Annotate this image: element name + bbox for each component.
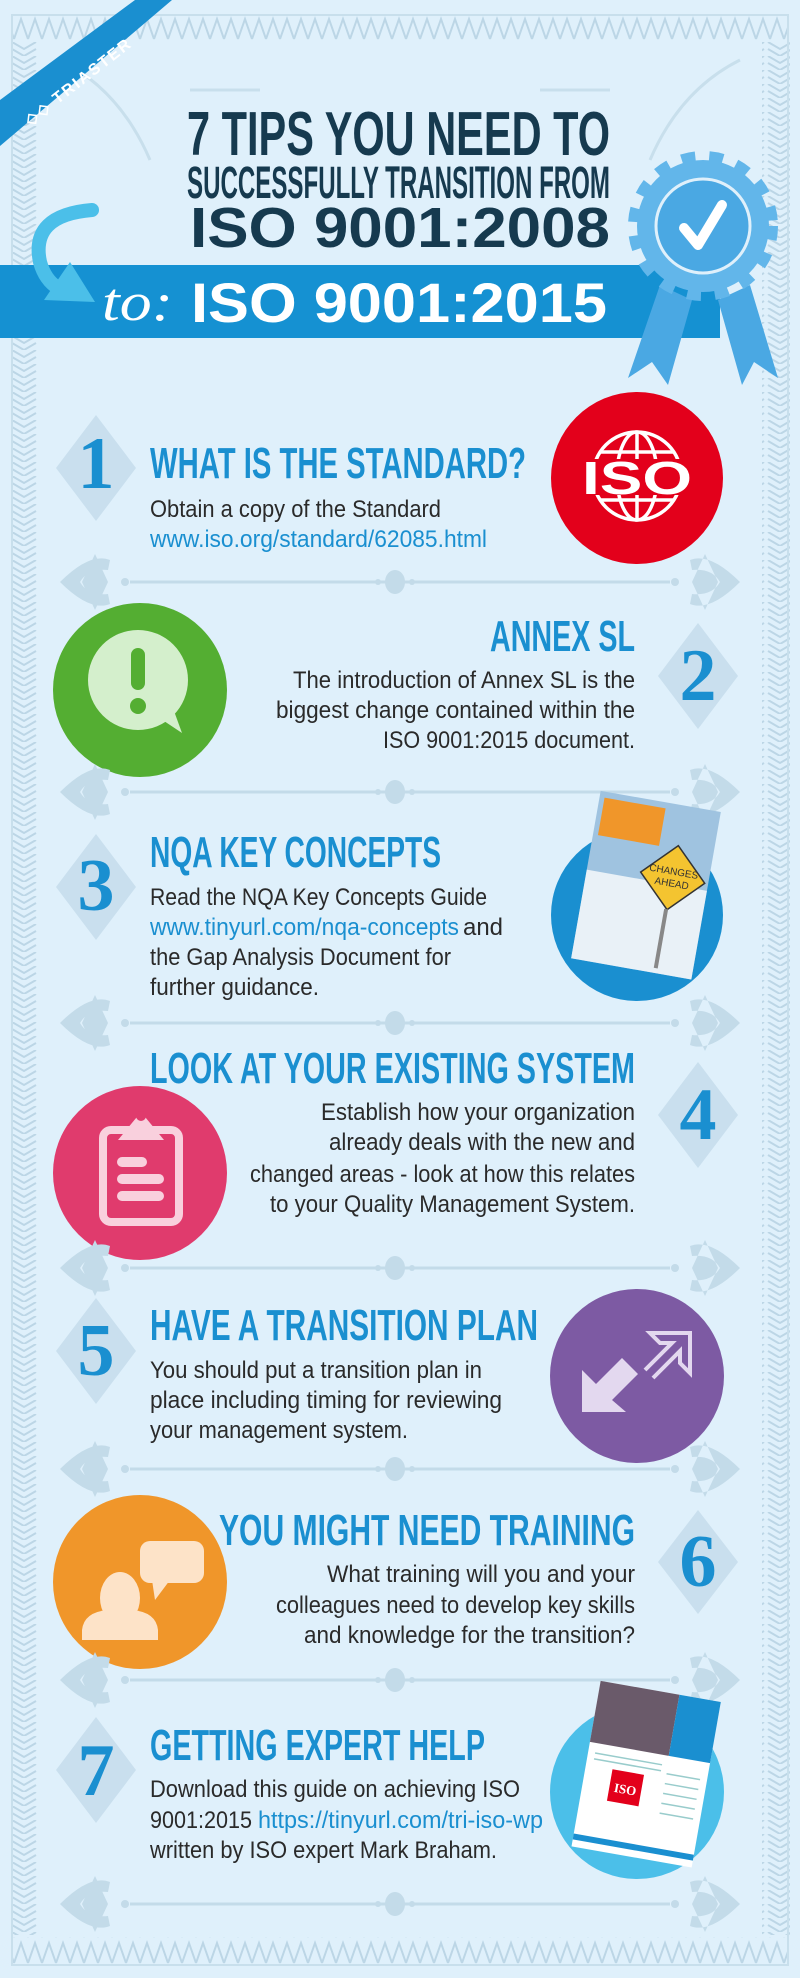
tip 1: what is the standard	[56, 392, 723, 564]
tip 2: annex SL	[53, 603, 738, 777]
tip 7: expert help: https://tinyurl.com/tri-iso-wp	[258, 1807, 543, 1834]
tip 6: training: 6	[680, 1521, 716, 1603]
tip 1: what is the standard: www.iso.org/standard/62085.html	[149, 526, 487, 553]
tip 7: expert help: 7	[78, 1730, 114, 1812]
blue band with subtitle: ISO 9001:2015	[191, 271, 607, 334]
icon: key concepts booklet	[551, 791, 723, 1001]
tip 5: transition plan: 5	[78, 1310, 114, 1392]
icon: ISO logo: ISO	[582, 452, 692, 504]
tip 2: annex SL: 2	[680, 635, 716, 717]
tip 5: transition plan: HAVE A TRANSITION PLAN	[150, 1301, 538, 1350]
tip 3: NQA key concepts	[56, 791, 723, 1001]
blue band with subtitle: to:	[102, 272, 173, 332]
tip 2: annex SL: ISO 9001:2015 document.	[383, 727, 635, 754]
tip 7: expert help: 9001:2015	[150, 1807, 252, 1834]
tip 4: look at your existing system: changed areas - look at how this relates	[250, 1161, 635, 1188]
icon: guide document: ISO	[613, 1780, 638, 1799]
logo: Triaster corner ribbon: ◇◇ TRIASTER	[21, 35, 136, 130]
icon: transition arrows	[550, 1289, 724, 1463]
tip 2: annex SL: The introduction of Annex SL is the	[293, 667, 635, 694]
icon: exclamation bubble	[53, 603, 227, 777]
icon: person with speech bubble	[53, 1495, 227, 1669]
icon: ISO logo	[551, 392, 723, 564]
tip 1: what is the standard: WHAT IS THE STANDARD?	[150, 439, 526, 488]
tip 3: NQA key concepts: Read the NQA Key Concepts Guide	[150, 884, 487, 911]
icon: key concepts booklet: CHANGES	[648, 863, 699, 882]
tip 3: NQA key concepts: and	[463, 914, 503, 941]
icon: clipboard	[53, 1086, 227, 1260]
tip 4: look at your existing system: to your Quality Management System.	[270, 1191, 635, 1218]
tip 4: look at your existing system: Establish how your organization	[321, 1099, 635, 1126]
tip 3: NQA key concepts: 3	[78, 845, 114, 927]
icon: key concepts booklet: AHEAD	[654, 876, 689, 893]
tip 6: training	[53, 1495, 738, 1669]
title	[187, 100, 610, 260]
tip 3: NQA key concepts: the Gap Analysis Document for	[150, 944, 451, 971]
tip 7: expert help: GETTING EXPERT HELP	[150, 1721, 485, 1770]
tip 2: annex SL: biggest change contained within the	[276, 697, 635, 724]
tip 5: transition plan: place including timing for reviewing	[150, 1387, 502, 1414]
tip 3: NQA key concepts: www.tinyurl.com/nqa-concepts	[149, 914, 459, 941]
tip 6: training: What training will you and your	[327, 1561, 635, 1588]
tip 4: look at your existing system: already deals with the new and	[329, 1129, 635, 1156]
tip 5: transition plan	[56, 1289, 724, 1463]
tip 3: NQA key concepts: NQA KEY CONCEPTS	[150, 828, 441, 877]
tip 7: expert help: Download this guide on achieving ISO	[150, 1776, 520, 1803]
tip 4: look at your existing system: 4	[680, 1074, 716, 1156]
tip 4: look at your existing system	[53, 1044, 738, 1260]
tip 6: training: colleagues need to develop key skills	[276, 1592, 635, 1619]
tip 7: expert help: written by ISO expert Mark Braham.	[149, 1837, 497, 1864]
tip 1: what is the standard: Obtain a copy of the Standard	[150, 496, 441, 523]
icon: curved arrow	[39, 210, 95, 302]
tip 1: what is the standard: 1	[78, 423, 114, 505]
tip 3: NQA key concepts: further guidance.	[150, 974, 319, 1001]
tip 7: expert help	[56, 1681, 724, 1879]
tip 5: transition plan: your management system.	[150, 1417, 408, 1444]
tip 2: annex SL: ANNEX SL	[490, 612, 635, 661]
title: ISO 9001:2008	[190, 196, 610, 260]
tip 6: training: and knowledge for the transition?	[304, 1622, 635, 1649]
logo: Triaster corner ribbon	[0, 0, 172, 146]
icon: badge with ribbons	[628, 156, 778, 385]
icon: guide document	[550, 1681, 724, 1879]
blue band with subtitle	[0, 265, 720, 338]
title: 7 TIPS YOU NEED TO	[187, 100, 610, 169]
tip 5: transition plan: You should put a transition plan in	[150, 1357, 482, 1384]
